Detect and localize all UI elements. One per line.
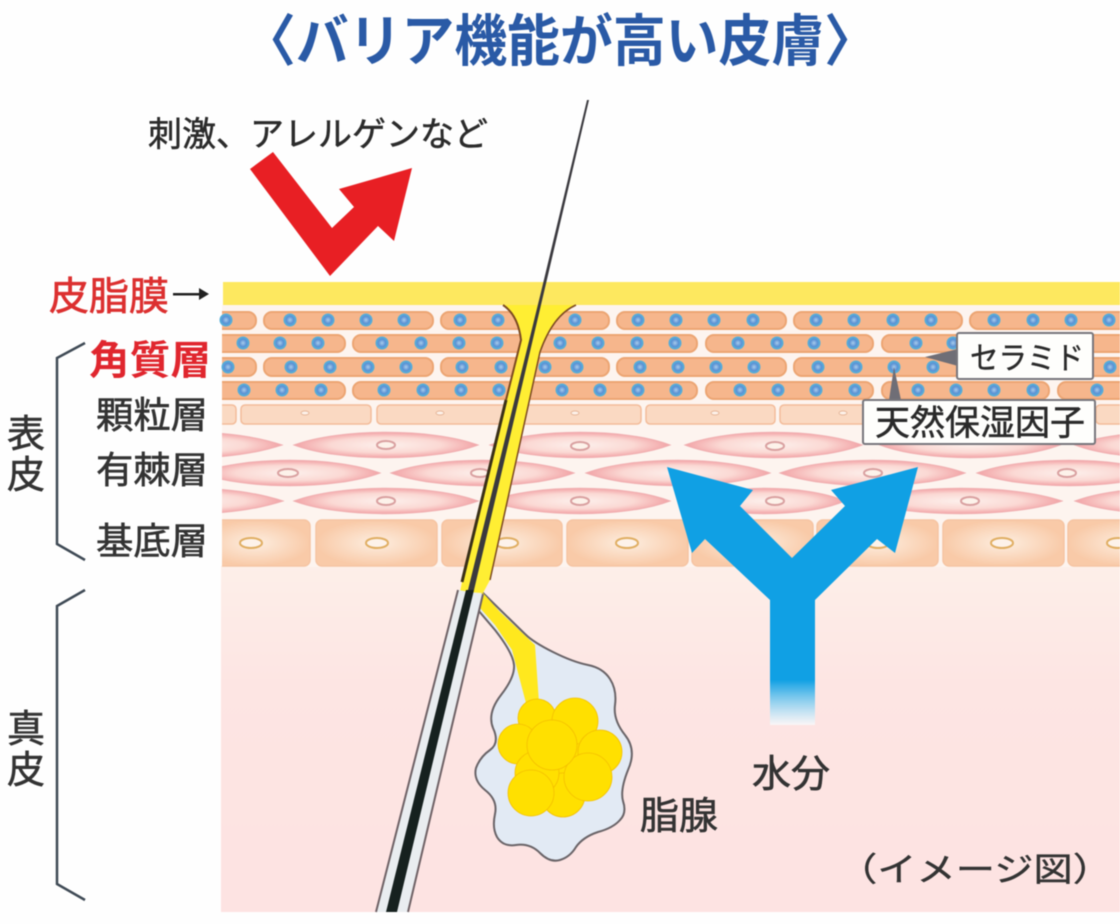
follicle sheath — [460, 305, 576, 593]
bracket: dermis — [57, 590, 85, 900]
label: dermis: 皮 — [7, 750, 45, 792]
sebum film band — [223, 282, 1120, 305]
label: stratum corneum: 角質層 — [89, 339, 211, 383]
ceramide pointer — [925, 349, 958, 366]
label: epidermis: 皮 — [7, 455, 45, 497]
label: water: 水分 — [752, 754, 830, 796]
ceramide and moisturizing factor dots — [220, 314, 1116, 396]
hair follicle and shaft — [376, 100, 589, 912]
label: sebum film: 皮脂膜 — [49, 276, 169, 319]
upper shaft — [468, 100, 589, 590]
water arrow — [667, 467, 918, 725]
label: dermis: 真 — [7, 709, 45, 751]
label: sebaceous gland: 脂腺 — [640, 796, 718, 838]
label: epidermis — [7, 414, 45, 497]
arrow: sebum film pointer — [173, 288, 209, 300]
callout: ceramide — [957, 333, 1093, 379]
title: 〈バリア機能が高い皮膚〉 — [243, 10, 877, 73]
panel: epidermis background — [222, 305, 1120, 567]
label: dermis — [7, 709, 45, 792]
label: epidermis: 表 — [7, 414, 45, 456]
sebaceous gland — [470, 593, 632, 861]
stratum granulosum cells — [200, 405, 1120, 424]
sebum duct — [470, 593, 539, 703]
sheath outline — [503, 305, 521, 400]
callout: natural moisturizing factor: 天然保湿因子 — [875, 404, 1085, 443]
shaft edges — [376, 590, 483, 912]
gland sac — [475, 593, 632, 861]
panel: dermis background — [221, 566, 1120, 912]
sebum lobes — [498, 698, 622, 817]
stratum spinosum cells — [98, 432, 1120, 514]
moisturizing factor pointer — [889, 367, 901, 400]
label: stratum basale: 基底層 — [96, 521, 208, 562]
sheath dark left edge — [462, 400, 506, 582]
label: stratum spinosum: 有棘層 — [96, 450, 208, 491]
shaft core — [386, 590, 474, 912]
stratum basale cells — [200, 520, 1120, 566]
callout: ceramide: セラミド — [970, 341, 1084, 376]
stratum corneum cells — [190, 312, 1120, 399]
icon: red arrow bouncing off skin — [250, 152, 412, 276]
label: irritants and allergens: 刺激、アレルゲンなど — [148, 116, 488, 154]
bracket: epidermis — [57, 343, 85, 560]
note: conceptual image: （イメージ図） — [838, 851, 1112, 888]
lower shaft — [376, 590, 483, 912]
cell nuclei — [240, 411, 1120, 548]
label: stratum granulosum: 顆粒層 — [96, 395, 208, 436]
